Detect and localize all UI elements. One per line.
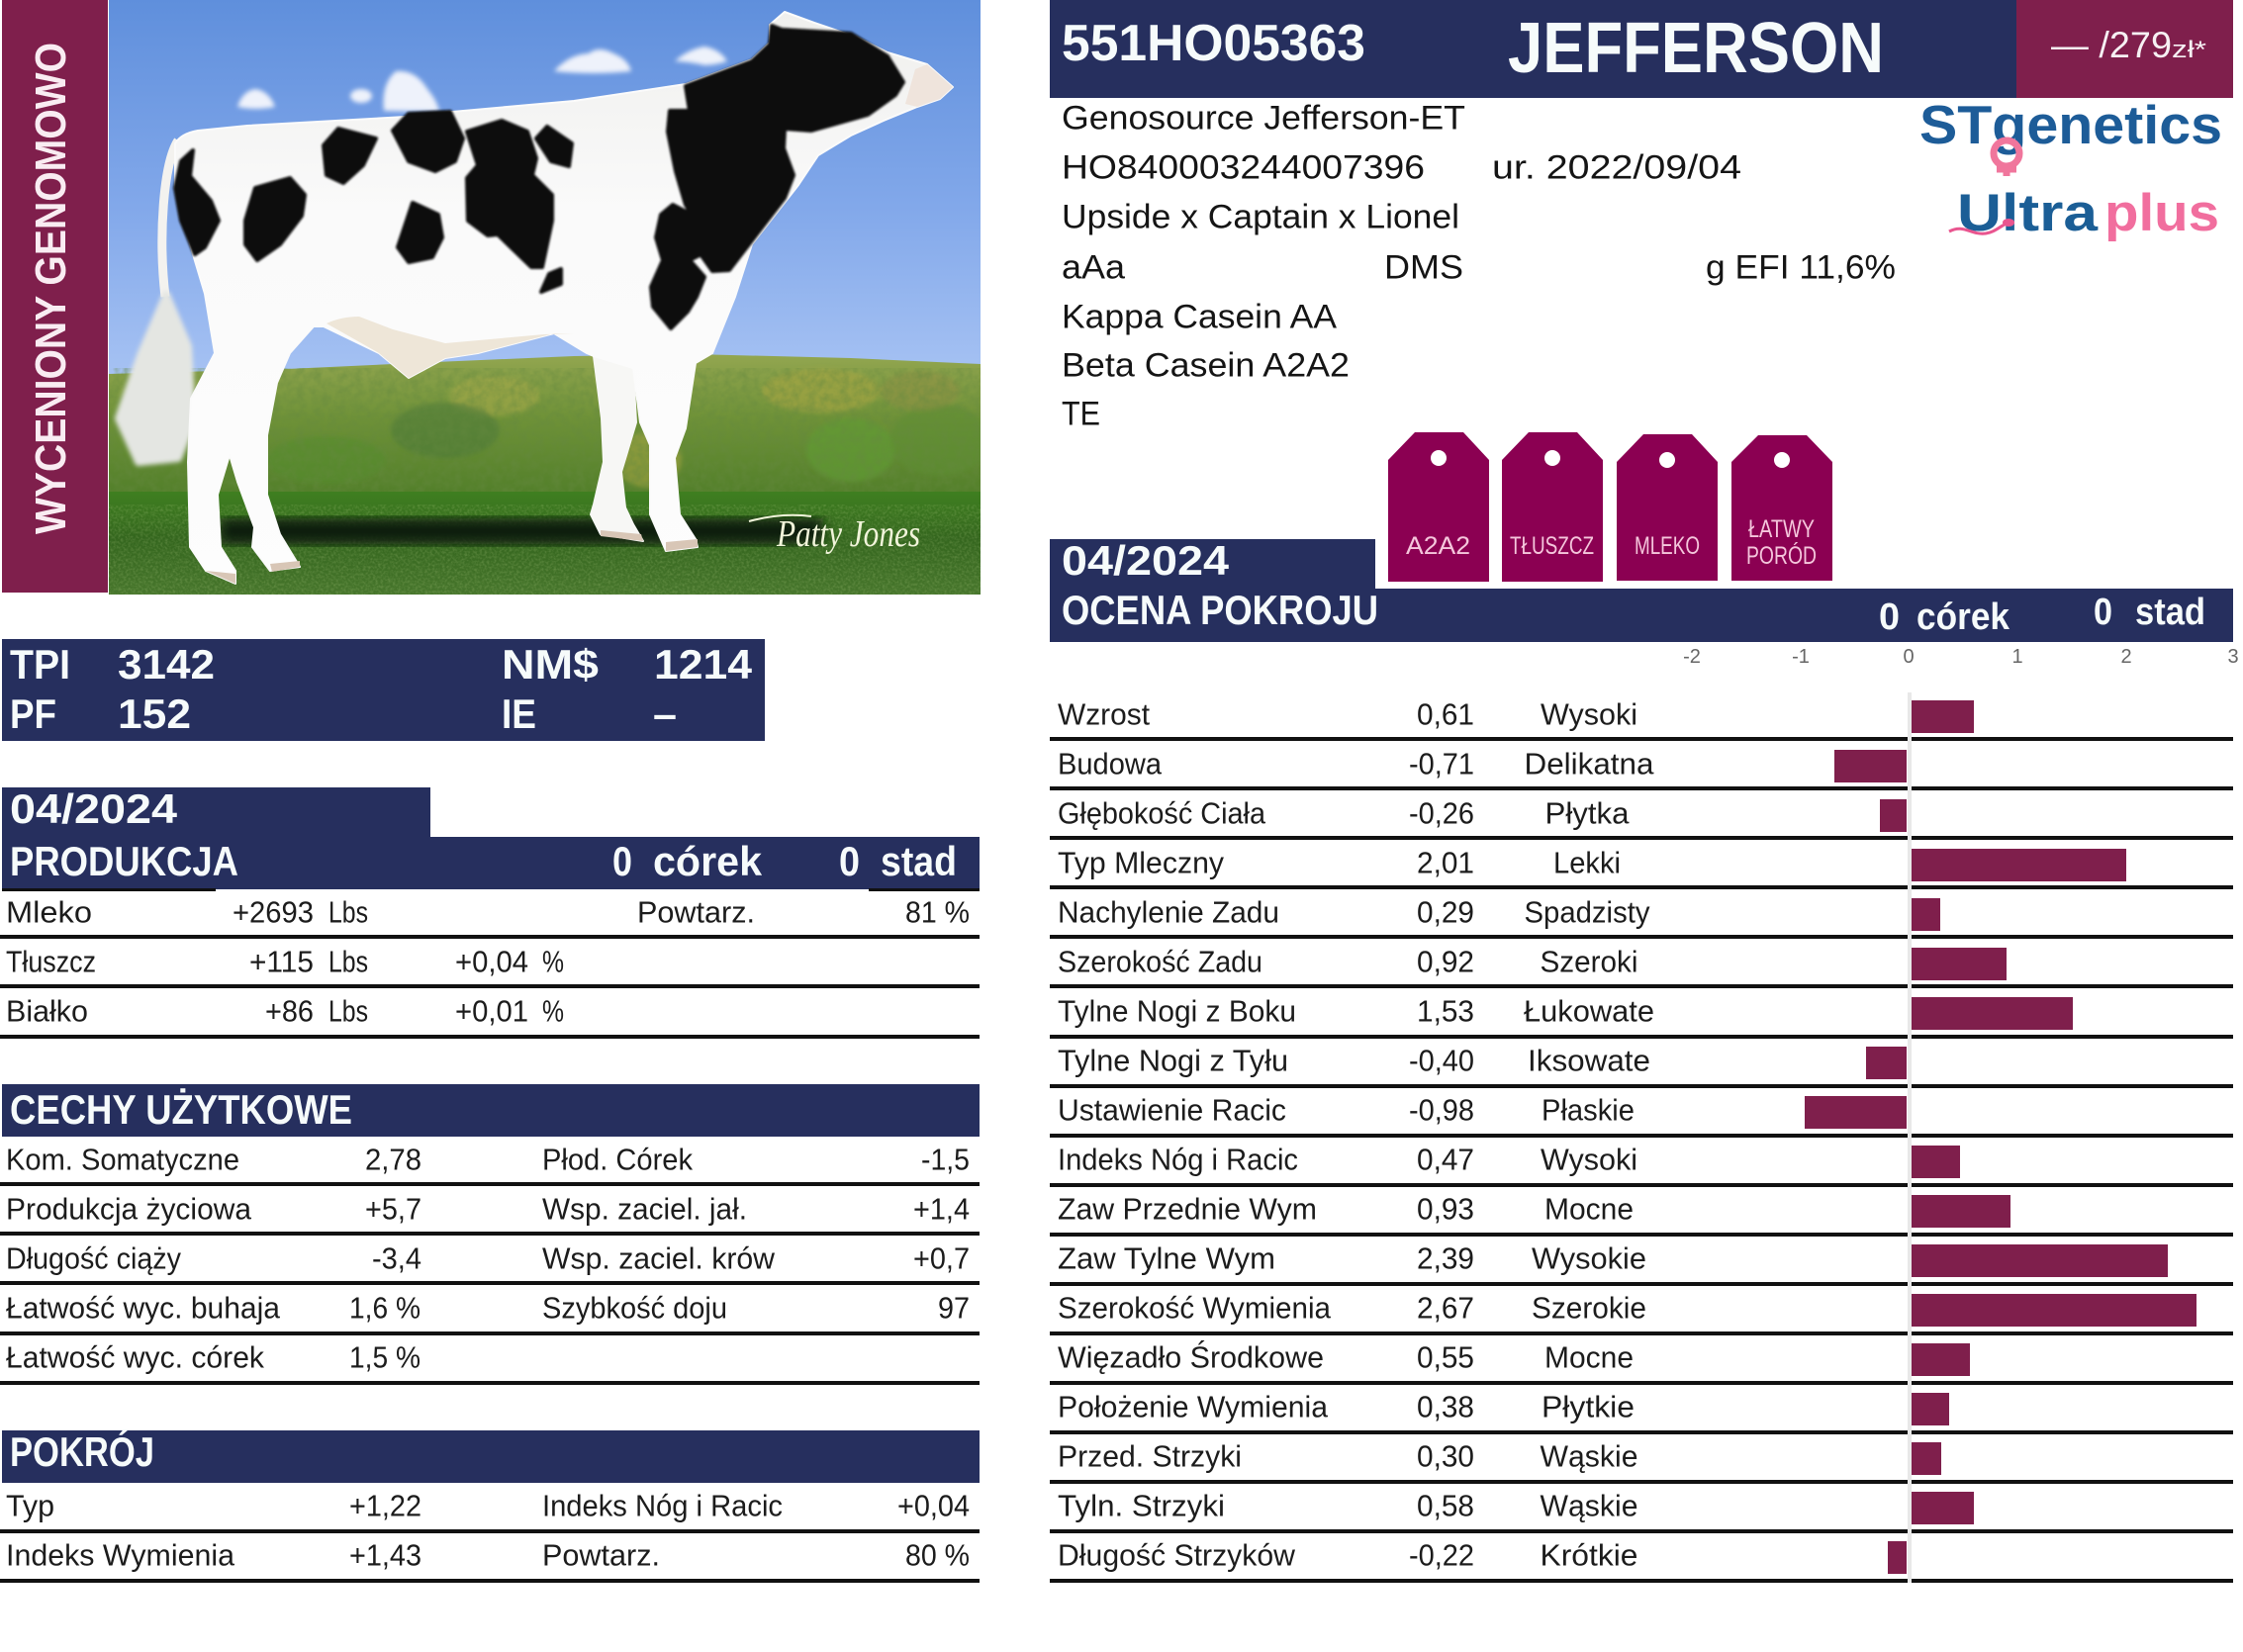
bull name: JEFFERSON bbox=[1508, 9, 1884, 88]
panel: production: % bbox=[542, 993, 564, 1029]
tag: A2A2: A2A2 bbox=[1406, 532, 1470, 560]
trait names: Zaw Tylne Wym bbox=[1058, 1240, 1275, 1276]
panel: conformation heading: 04/2024 bbox=[1062, 537, 1230, 584]
trait names: Budowa bbox=[1058, 746, 1163, 781]
trait values: 0,61 bbox=[1417, 696, 1474, 732]
panel: functional traits: Łatwość wyc. buhaja bbox=[6, 1290, 281, 1326]
chart axis: -2 bbox=[1683, 646, 1701, 668]
trait names: Szerokość Zadu bbox=[1058, 944, 1262, 979]
photo: Holstein cow in a field bbox=[109, 0, 989, 595]
panel: functional traits: +1,4 bbox=[913, 1191, 970, 1227]
panel: functional traits bbox=[0, 1084, 980, 1385]
trait descriptors: Mocne bbox=[1544, 1191, 1634, 1227]
trait names: Tylne Nogi z Tyłu bbox=[1058, 1043, 1288, 1078]
photographer signature: Patty Jones bbox=[776, 513, 920, 555]
panel: conformation heading: stad bbox=[2135, 592, 2205, 633]
header bar bbox=[1050, 0, 2233, 98]
panel: conformation summary: Indeks Wymienia bbox=[6, 1537, 235, 1573]
trait descriptors: Płytka bbox=[1545, 795, 1630, 831]
trait descriptors: Łukowate bbox=[1524, 993, 1654, 1029]
panel: TPI / NM$ indexes: NM$ bbox=[502, 641, 599, 688]
trait values: -0,71 bbox=[1409, 746, 1474, 781]
bars bbox=[1805, 700, 2196, 1574]
panel: TPI / NM$ indexes: 1214 bbox=[654, 641, 753, 688]
row rules bbox=[1050, 737, 2233, 1583]
trait values: 0,38 bbox=[1417, 1389, 1474, 1424]
cow tail bbox=[119, 140, 192, 462]
panel: production: Mleko bbox=[6, 894, 92, 930]
panel: production: Tłuszcz bbox=[6, 944, 96, 979]
panel: TPI / NM$ indexes: 3142 bbox=[118, 641, 215, 688]
trait names: Nachylenie Zadu bbox=[1058, 894, 1279, 930]
trait descriptors: Iksowate bbox=[1528, 1043, 1650, 1078]
linear traits table with bar chart bbox=[1050, 692, 2233, 1583]
chart axis: 0 bbox=[1903, 646, 1915, 668]
panel: production bbox=[0, 785, 980, 1039]
text block: bull details: Upside x Captain x Lionel bbox=[1062, 198, 1459, 235]
panel: TPI / NM$ indexes: PF bbox=[10, 690, 56, 737]
tag: TŁUSZCZ: TŁUSZCZ bbox=[1510, 532, 1594, 560]
logo: Ultraplus: Ultra bbox=[1957, 184, 2099, 242]
panel: conformation summary: +1,43 bbox=[349, 1537, 421, 1573]
text block: bull details: ur. 2022/09/04 bbox=[1492, 148, 1741, 186]
chart axis: 3 bbox=[2227, 646, 2239, 668]
hooves bbox=[206, 530, 698, 584]
panel: functional traits: Kom. Somatyczne bbox=[6, 1142, 239, 1177]
cow far front leg bbox=[591, 356, 643, 541]
chart axis bbox=[1683, 646, 2239, 668]
logo: Ultraplus: plus bbox=[2104, 184, 2219, 242]
panel: conformation summary: +1,22 bbox=[349, 1488, 421, 1523]
panel: functional traits: +5,7 bbox=[365, 1191, 421, 1227]
panel: functional traits: -1,5 bbox=[921, 1142, 970, 1177]
panel: functional traits: 1,6 % bbox=[349, 1290, 421, 1326]
trait values: 0,58 bbox=[1417, 1488, 1474, 1523]
text block: bull details: g EFI 11,6% bbox=[1706, 249, 1896, 287]
panel: functional traits: Wsp. zaciel. krów bbox=[542, 1240, 776, 1276]
panel: TPI / NM$ indexes: IE bbox=[502, 690, 536, 737]
panel: functional traits: 97 bbox=[938, 1290, 970, 1326]
panel: functional traits: 2,78 bbox=[365, 1142, 421, 1177]
panel: production: 04/2024 bbox=[10, 785, 178, 832]
panel: production: Białko bbox=[6, 993, 88, 1029]
trait descriptors: Krótkie bbox=[1540, 1537, 1638, 1573]
panel: conformation summary: Typ bbox=[6, 1488, 54, 1523]
trait values bbox=[1409, 696, 1474, 1573]
trait values: 2,67 bbox=[1417, 1290, 1474, 1326]
panel: production: 81 % bbox=[905, 894, 970, 930]
header bar: 551HO05363 bbox=[1062, 15, 1365, 72]
panel: conformation heading bbox=[1050, 537, 2233, 642]
panel: production: Lbs bbox=[328, 894, 368, 930]
panel: functional traits: Płod. Córek bbox=[542, 1142, 693, 1177]
tag: TŁUSZCZ bbox=[1502, 432, 1603, 582]
chart axis: 1 bbox=[2011, 646, 2023, 668]
panel: functional traits: Produkcja życiowa bbox=[6, 1191, 252, 1227]
panel: functional traits: Szybkość doju bbox=[542, 1290, 727, 1326]
icon: sperm swoosh bbox=[1949, 219, 2014, 233]
icon: venus symbol bbox=[1994, 140, 2019, 176]
text block: bull details: DMS bbox=[1384, 249, 1463, 287]
panel: production: 0 bbox=[612, 838, 632, 884]
trait descriptors: Spadzisty bbox=[1524, 894, 1650, 930]
tag: ŁATWY PORÓD: ŁATWY bbox=[1748, 515, 1815, 543]
panel: functional traits: CECHY UŻYTKOWE bbox=[10, 1086, 352, 1133]
tag: ŁATWY PORÓD: PORÓD bbox=[1746, 541, 1817, 570]
trait values: 0,47 bbox=[1417, 1142, 1474, 1177]
trait names: Indeks Nóg i Racic bbox=[1058, 1142, 1298, 1177]
trait names: Położenie Wymienia bbox=[1058, 1389, 1329, 1424]
trait values: 0,29 bbox=[1417, 894, 1474, 930]
trait descriptors bbox=[1524, 696, 1654, 1573]
trait names: Tyln. Strzyki bbox=[1058, 1488, 1225, 1523]
panel: production: +86 bbox=[265, 993, 314, 1029]
trait names: Głębokość Ciała bbox=[1058, 795, 1266, 831]
panel: conformation heading: OCENA POKROJU bbox=[1062, 587, 1378, 633]
trait values: -0,22 bbox=[1409, 1537, 1474, 1573]
trait descriptors: Wysokie bbox=[1532, 1240, 1646, 1276]
trait descriptors: Szerokie bbox=[1532, 1290, 1646, 1326]
trait descriptors: Szeroki bbox=[1540, 944, 1638, 979]
panel: TPI / NM$ indexes: TPI bbox=[10, 641, 70, 688]
panel: functional traits: 1,5 % bbox=[349, 1339, 421, 1375]
trait values: 1,53 bbox=[1417, 993, 1474, 1029]
trait descriptors: Delikatna bbox=[1524, 746, 1654, 781]
text block: bull details: Beta Casein A2A2 bbox=[1062, 346, 1350, 384]
trait descriptors: Wąskie bbox=[1540, 1438, 1638, 1474]
text block: bull details: Kappa Casein AA bbox=[1062, 299, 1337, 336]
text block: bull details bbox=[1062, 99, 1896, 433]
panel: production: Lbs bbox=[328, 944, 368, 979]
trait values: -0,98 bbox=[1409, 1092, 1474, 1128]
trait values: 0,55 bbox=[1417, 1339, 1474, 1375]
panel: conformation heading: 0 bbox=[2094, 592, 2112, 633]
trait descriptors: Wąskie bbox=[1540, 1488, 1638, 1523]
cow body bbox=[175, 12, 953, 584]
tag: ŁATWY PORÓD bbox=[1731, 435, 1832, 581]
trait names: Tylne Nogi z Boku bbox=[1058, 993, 1296, 1029]
panel: functional traits: Długość ciąży bbox=[6, 1240, 181, 1276]
text block: bull details: aAa bbox=[1062, 249, 1125, 287]
trait descriptors: Lekki bbox=[1553, 845, 1621, 880]
panel: vertical genomic banner bbox=[2, 0, 108, 593]
panel: production: córek bbox=[653, 838, 763, 884]
trait values: 0,92 bbox=[1417, 944, 1474, 979]
trait names: Typ Mleczny bbox=[1058, 845, 1224, 880]
price: — /279 bbox=[2051, 25, 2172, 65]
panel: production: +115 bbox=[249, 944, 314, 979]
text block: bull details: TE bbox=[1062, 396, 1100, 433]
trait descriptors: Wysoki bbox=[1541, 1142, 1637, 1177]
panel: conformation summary bbox=[0, 1427, 980, 1583]
panel: production: +0,04 bbox=[455, 944, 528, 979]
trait names: Wzrost bbox=[1058, 696, 1150, 732]
trait values: -0,26 bbox=[1409, 795, 1474, 831]
trait names: Szerokość Wymienia bbox=[1058, 1290, 1332, 1326]
trait descriptors: Wysoki bbox=[1541, 696, 1637, 732]
trait values: 0,30 bbox=[1417, 1438, 1474, 1474]
trait names: Zaw Przednie Wym bbox=[1058, 1191, 1317, 1227]
trait names: Ustawienie Racic bbox=[1058, 1092, 1286, 1128]
chart axis: 2 bbox=[2120, 646, 2132, 668]
panel: production: +0,01 bbox=[455, 993, 528, 1029]
panel: conformation heading: 0 bbox=[1879, 597, 1900, 638]
panel: TPI / NM$ indexes: 152 bbox=[118, 690, 191, 737]
panel: TPI / NM$ indexes bbox=[2, 639, 765, 741]
panel: production: % bbox=[542, 944, 564, 979]
logo: STgenetics: STgenetics bbox=[1919, 94, 2222, 155]
panel: conformation summary: Powtarz. bbox=[542, 1537, 660, 1573]
trait values: 2,01 bbox=[1417, 845, 1474, 880]
panel: functional traits: Wsp. zaciel. jał. bbox=[542, 1191, 747, 1227]
trait names: Więzadło Środkowe bbox=[1058, 1339, 1324, 1375]
panel: production: stad bbox=[881, 838, 957, 884]
text block: bull details: Genosource Jefferson-ET bbox=[1062, 99, 1465, 137]
trait values: 0,93 bbox=[1417, 1191, 1474, 1227]
production heading: PRODUKCJA bbox=[10, 838, 238, 884]
trait descriptors: Mocne bbox=[1544, 1339, 1634, 1375]
panel: production: Lbs bbox=[328, 993, 368, 1029]
panel: conformation summary: +0,04 bbox=[897, 1488, 970, 1523]
panel: conformation summary: Indeks Nóg i Racic bbox=[542, 1488, 783, 1523]
panel: production: Powtarz. bbox=[637, 894, 755, 930]
panel: conformation summary: POKRÓJ bbox=[10, 1427, 154, 1475]
panel: production: +2693 bbox=[233, 894, 314, 930]
cow black markings bbox=[175, 26, 903, 328]
panel: conformation summary: 80 % bbox=[905, 1537, 970, 1573]
cow muzzle bbox=[905, 64, 953, 107]
trait descriptors: Płytkie bbox=[1542, 1389, 1635, 1424]
trait descriptors: Płaskie bbox=[1542, 1092, 1635, 1128]
trait values: 2,39 bbox=[1417, 1240, 1474, 1276]
panel: functional traits: -3,4 bbox=[372, 1240, 421, 1276]
text block: bull details: HO840003244007396 bbox=[1062, 148, 1425, 186]
logo: Ultraplus bbox=[1949, 184, 2219, 242]
trait names: Długość Strzyków bbox=[1058, 1537, 1296, 1573]
panel: production: 0 bbox=[839, 838, 860, 884]
panel: TPI / NM$ indexes: – bbox=[653, 690, 677, 737]
trait names bbox=[1058, 696, 1332, 1573]
tag: A2A2 bbox=[1388, 432, 1489, 582]
trait values: -0,40 bbox=[1409, 1043, 1474, 1078]
trait names: Przed. Strzyki bbox=[1058, 1438, 1242, 1474]
panel: functional traits: Łatwość wyc. córek bbox=[6, 1339, 264, 1375]
cow udder bbox=[327, 317, 574, 378]
chart axis: -1 bbox=[1792, 646, 1810, 668]
panel: conformation heading: córek bbox=[1916, 597, 2010, 638]
panel: functional traits: +0,7 bbox=[913, 1240, 970, 1276]
tag: MLEKO bbox=[1617, 434, 1718, 581]
header bar: zł* bbox=[2172, 37, 2206, 63]
tag: MLEKO: MLEKO bbox=[1635, 532, 1700, 560]
